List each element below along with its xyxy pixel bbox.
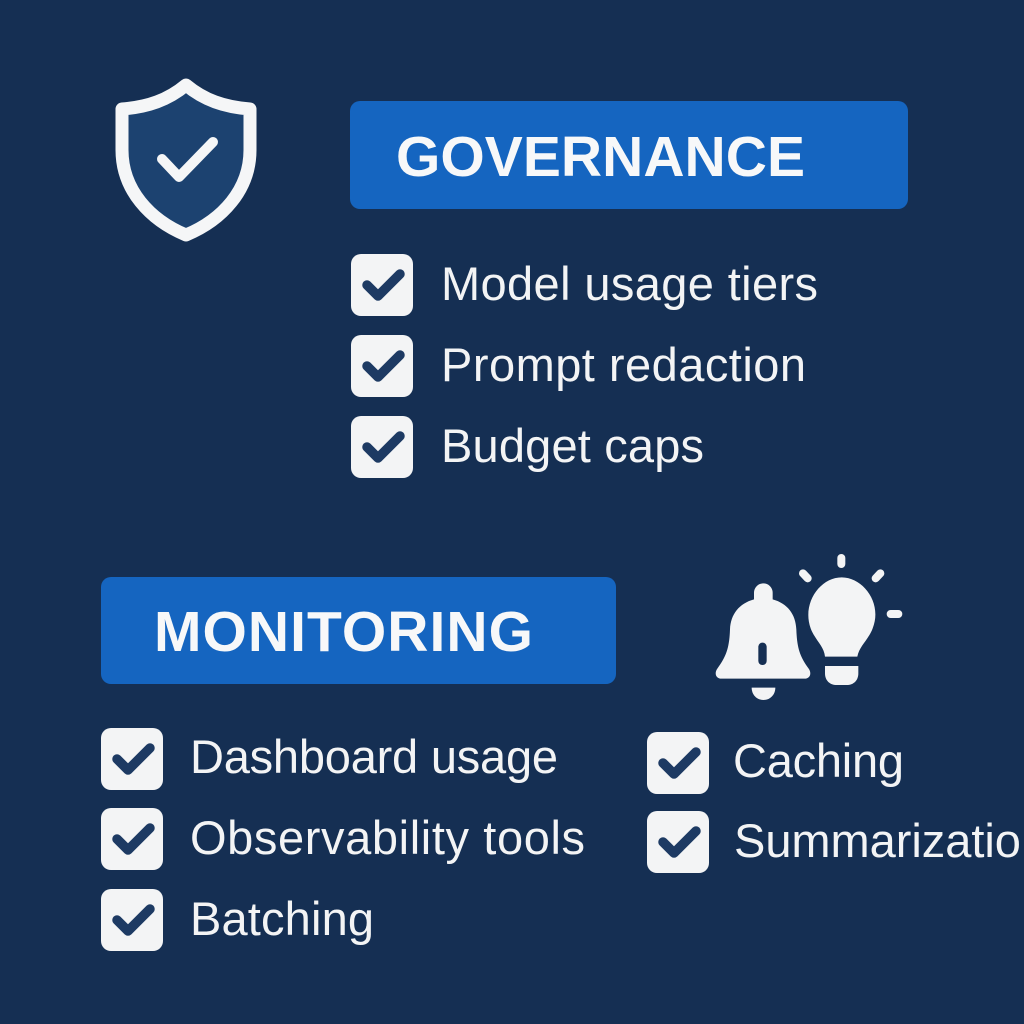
item: caching xyxy=(647,732,904,794)
icon: bell xyxy=(716,583,810,700)
item: batching: Batching xyxy=(190,892,374,945)
item: budget caps xyxy=(351,416,704,478)
icon: shield with check xyxy=(122,85,250,235)
item: budget caps: Budget caps xyxy=(441,419,704,472)
panel: optimization xyxy=(647,732,1024,873)
item: prompt redaction: Prompt redaction xyxy=(441,338,806,391)
item: summarization xyxy=(647,811,1024,873)
icon: bell and light bulb xyxy=(716,558,898,700)
item: observability tools: Observability tools xyxy=(190,811,585,864)
item: batching xyxy=(101,889,374,951)
item: prompt redaction xyxy=(351,335,806,397)
heading: monitoring: MONITORING xyxy=(154,600,533,664)
item: dashboard usage xyxy=(101,728,558,790)
icon: light bulb xyxy=(803,558,898,685)
item: observability tools xyxy=(101,808,585,870)
panel: monitoring xyxy=(101,577,616,951)
item: caching: Caching xyxy=(733,734,904,787)
heading: governance xyxy=(350,101,908,209)
item: dashboard usage: Dashboard usage xyxy=(190,730,558,783)
item: model usage tiers xyxy=(351,254,818,316)
heading: monitoring xyxy=(101,577,616,684)
panel: governance xyxy=(350,101,908,478)
heading: governance: GOVERNANCE xyxy=(396,125,805,189)
item: model usage tiers: Model usage tiers xyxy=(441,257,818,310)
